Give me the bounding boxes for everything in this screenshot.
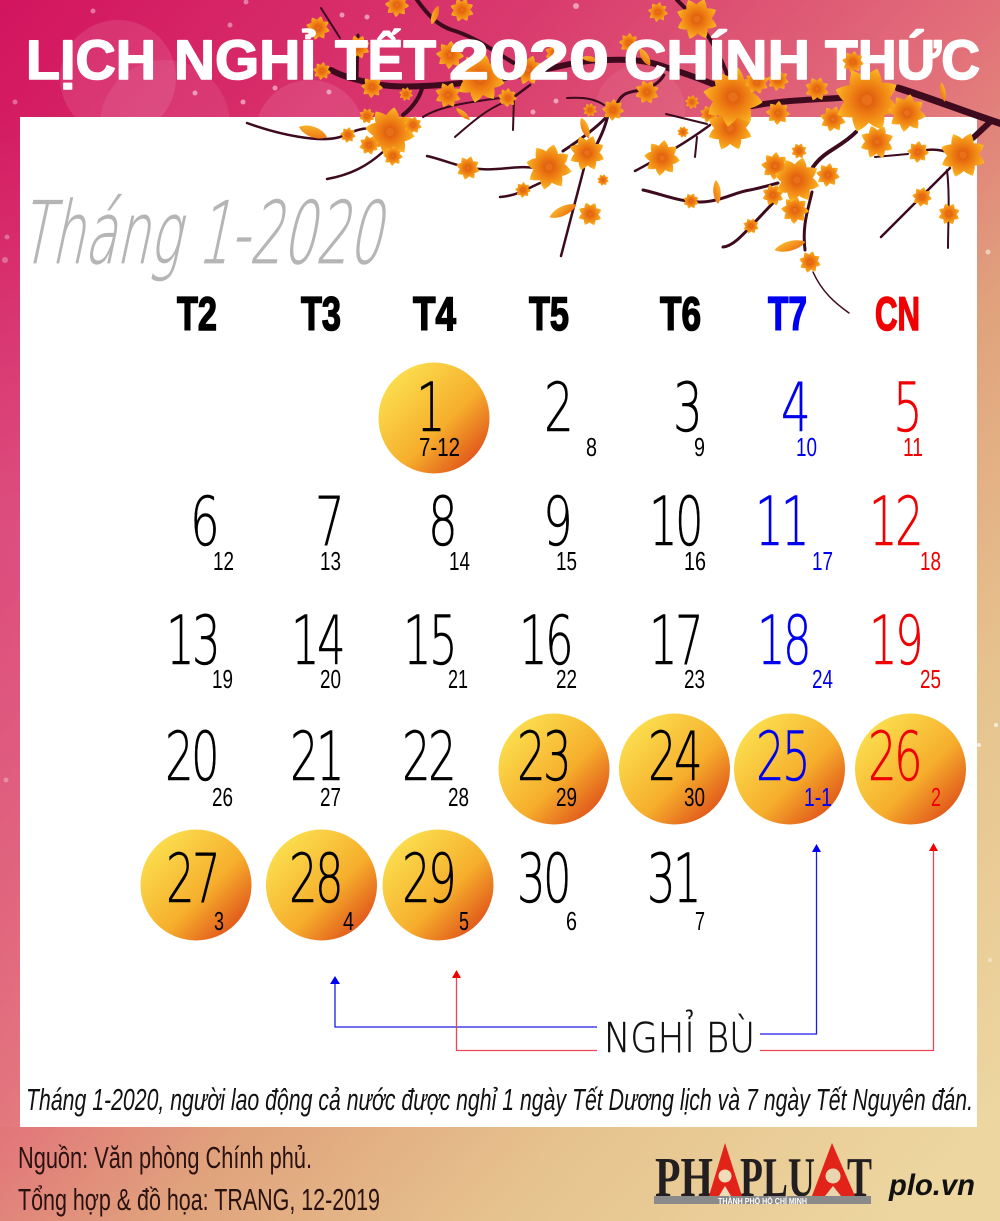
logo: Pháp Luật: THÀNH PHỐ HỒ CHÍ MINH (718, 1196, 807, 1206)
row 2: 8 (428, 483, 455, 562)
title: THỨC (825, 28, 980, 91)
row 3: 17 (649, 602, 701, 681)
lunar row 3 (212, 664, 941, 694)
left strip lightening (0, 117, 20, 1127)
lunar row 2: 15 (556, 546, 577, 576)
logo: Pháp Luật (654, 1143, 872, 1209)
lunar row 4: 28 (448, 782, 469, 812)
weekday headers: T7 (768, 287, 807, 340)
logo: Pháp Luật: PLU (740, 1147, 815, 1209)
month heading: Tháng 1-2020 (15, 183, 398, 284)
title: CHÍNH (624, 28, 810, 91)
compensatory-leave arrows (330, 843, 938, 1050)
title: LỊCH (26, 28, 156, 91)
row 4: 23 (517, 718, 569, 797)
row 4: 21 (290, 718, 342, 797)
row 5: 30 (517, 840, 569, 919)
title: TẾT (335, 28, 436, 91)
lunar row 2: 17 (812, 546, 833, 576)
arrow: to day 26 (760, 843, 938, 1050)
lunar row 5: 4 (343, 906, 354, 936)
row 2: 11 (755, 483, 807, 562)
row 4: 22 (402, 718, 454, 797)
source credit: Tổng hợp & đồ họa: TRANG, 12-2019 (18, 1182, 380, 1217)
lunar row 5: 3 (214, 906, 224, 936)
row 4 (165, 718, 920, 797)
row 3: 15 (403, 602, 455, 681)
lunar row 1: 11 (903, 432, 923, 462)
row 4: 24 (648, 718, 700, 797)
holiday circles (140, 362, 966, 940)
lunar row 4: 2 (931, 782, 941, 812)
lunar row 3: 19 (212, 664, 233, 694)
arrow: to day 29 (452, 970, 597, 1050)
row 2: 9 (543, 483, 570, 562)
row 5 (166, 840, 699, 919)
lunar row 4: 30 (684, 782, 705, 812)
row 2: 12 (869, 483, 921, 562)
row 1: 4 (781, 369, 808, 448)
plum blossom branch (247, 0, 1000, 313)
row 3: 14 (291, 602, 343, 681)
lunar row 2: 16 (684, 546, 706, 576)
lunar row 1: 8 (586, 432, 597, 462)
row 4: 26 (868, 718, 920, 797)
title: NGHỈ (174, 28, 316, 91)
lunar row 1: 10 (796, 432, 817, 462)
lunar row 5: 7 (695, 906, 705, 936)
white calendar panel (20, 117, 977, 1127)
lunar row 3: 20 (320, 664, 341, 694)
lunar row 4: 27 (320, 782, 341, 812)
row 3: 18 (757, 602, 809, 681)
lunar row 5 (214, 906, 705, 936)
logo: Pháp Luật: PH (655, 1147, 713, 1209)
lunar row 1: 7-12 (419, 432, 460, 462)
row 1: 2 (544, 369, 571, 448)
leaves (297, 5, 947, 255)
row 4: 25 (756, 718, 808, 797)
source credit: Nguồn: Văn phòng Chính phủ. (18, 1140, 312, 1175)
row 2: 10 (649, 483, 701, 562)
row 2: 6 (190, 483, 217, 562)
lunar row 3: 25 (920, 664, 941, 694)
row 3: 13 (166, 602, 218, 681)
row 1 (416, 369, 920, 448)
arrow: to day 25 (760, 844, 821, 1034)
lunar row 2: 13 (320, 546, 341, 576)
site name: plo.vn (888, 1169, 975, 1202)
row 5: 31 (647, 840, 699, 919)
blossom over title (840, 49, 866, 75)
lunar row 4: 29 (556, 782, 577, 812)
row 3 (166, 602, 921, 681)
row 4: 20 (165, 718, 217, 797)
lunar row 3: 22 (556, 664, 577, 694)
weekday headers: T6 (660, 287, 701, 340)
lunar row 2 (213, 546, 941, 576)
lunar row 4: 26 (212, 782, 233, 812)
lunar row 2: 12 (213, 546, 234, 576)
row 2: 7 (315, 483, 342, 562)
solar day numbers (165, 369, 921, 919)
lunar row 4 (212, 782, 941, 812)
source credit (18, 1140, 380, 1217)
arrow: to day 28 (330, 976, 597, 1027)
row 1: 3 (673, 369, 700, 448)
lunar row 5: 6 (566, 906, 577, 936)
row 5: 27 (166, 840, 218, 919)
weekday headers: T4 (413, 287, 456, 340)
weekday headers: T5 (529, 287, 569, 340)
label: NGHỈ BÙ: NGHỈ BÙ (604, 1009, 755, 1062)
title (26, 28, 980, 91)
blossoms (303, 0, 992, 275)
lunar row 4: 1-1 (804, 782, 832, 812)
lunar row 3: 23 (684, 664, 705, 694)
lunar row 5: 5 (459, 906, 469, 936)
row 1: 1 (416, 369, 443, 448)
weekday headers: T3 (301, 287, 341, 340)
weekday headers: T2 (177, 287, 217, 340)
branches (247, 0, 1000, 313)
row 3: 16 (519, 602, 571, 681)
lunar row 3: 21 (448, 664, 468, 694)
lunar row 3: 24 (812, 664, 833, 694)
lunar row 2: 14 (449, 546, 470, 576)
lunar day numbers (212, 432, 941, 936)
lunar row 2: 18 (920, 546, 941, 576)
row 5: 29 (402, 840, 454, 919)
row 3: 19 (869, 602, 921, 681)
row 1: 5 (893, 369, 920, 448)
background bokeh circles and dots (2, 0, 998, 962)
title: 2020 (449, 28, 609, 91)
logo: Pháp Luật: T (847, 1147, 872, 1209)
row 2 (190, 483, 921, 562)
lunar row 1 (419, 432, 923, 462)
lunar row 1: 9 (694, 432, 705, 462)
row 5: 28 (289, 840, 341, 919)
weekday headers: CN (875, 287, 920, 340)
weekday headers (177, 287, 920, 340)
